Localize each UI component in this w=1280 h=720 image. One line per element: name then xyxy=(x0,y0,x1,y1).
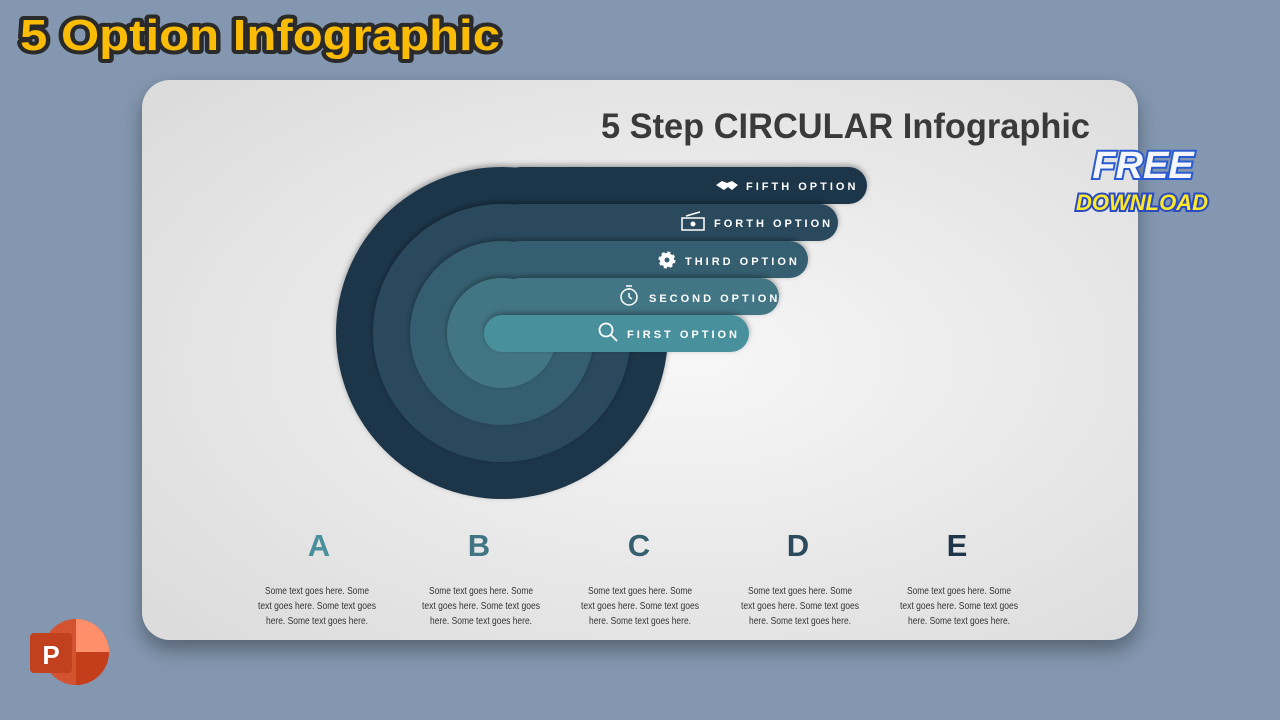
column E: text goes here. Some text goes xyxy=(900,600,1018,612)
column C xyxy=(581,528,699,627)
column E: Some text goes here. Some xyxy=(907,585,1011,597)
step 4 xyxy=(373,204,838,462)
column A: here. Some text goes here. xyxy=(266,615,368,627)
label: fifth option: FIFTH OPTION xyxy=(746,181,858,193)
column B: here. Some text goes here. xyxy=(430,615,532,627)
step 2 xyxy=(447,278,779,388)
column B: Some text goes here. Some xyxy=(429,585,533,597)
column D: D xyxy=(787,528,809,563)
heading: 5 Step CIRCULAR Infographic xyxy=(601,107,1090,146)
icon: powerpoint xyxy=(30,619,109,685)
icon: stopwatch xyxy=(621,286,637,305)
icon: handshake xyxy=(716,181,738,190)
label: second option xyxy=(621,286,780,305)
title: 5 Option Infographic xyxy=(20,11,500,60)
label: forth option: FORTH OPTION xyxy=(714,218,833,230)
label: first option xyxy=(600,324,740,341)
icon: gear xyxy=(660,253,674,267)
badge: free download: DOWNLOAD xyxy=(1076,190,1208,215)
column B: B xyxy=(468,528,490,563)
column A: A xyxy=(308,528,330,563)
step 1 xyxy=(484,315,749,352)
label: second option: SECOND OPTION xyxy=(649,293,780,305)
step 3 xyxy=(410,241,808,425)
column B xyxy=(422,528,540,627)
column A xyxy=(258,528,376,627)
label: first option: FIRST OPTION xyxy=(627,329,740,341)
column E: here. Some text goes here. xyxy=(908,615,1010,627)
chart: circular steps xyxy=(336,167,867,499)
column A: text goes here. Some text goes xyxy=(258,600,376,612)
label: forth option xyxy=(682,212,833,230)
icon: powerpoint: P xyxy=(42,640,60,670)
columns A-E xyxy=(258,528,1018,627)
column B: text goes here. Some text goes xyxy=(422,600,540,612)
column D: text goes here. Some text goes xyxy=(741,600,859,612)
column C: text goes here. Some text goes xyxy=(581,600,699,612)
column A: Some text goes here. Some xyxy=(265,585,369,597)
column C: here. Some text goes here. xyxy=(589,615,691,627)
column D: here. Some text goes here. xyxy=(749,615,851,627)
label: third option: THIRD OPTION xyxy=(685,256,800,268)
column D xyxy=(741,528,859,627)
column C: C xyxy=(628,528,650,563)
label: third option xyxy=(660,253,800,268)
badge: free download xyxy=(1076,145,1208,215)
step 5 xyxy=(336,167,867,499)
column E: E xyxy=(947,528,967,563)
badge: free download: FREE xyxy=(1092,145,1195,187)
icon: money xyxy=(682,212,704,230)
column D: Some text goes here. Some xyxy=(748,585,852,597)
column C: Some text goes here. Some xyxy=(588,585,692,597)
icon: magnifier xyxy=(600,324,617,341)
column E xyxy=(900,528,1018,627)
